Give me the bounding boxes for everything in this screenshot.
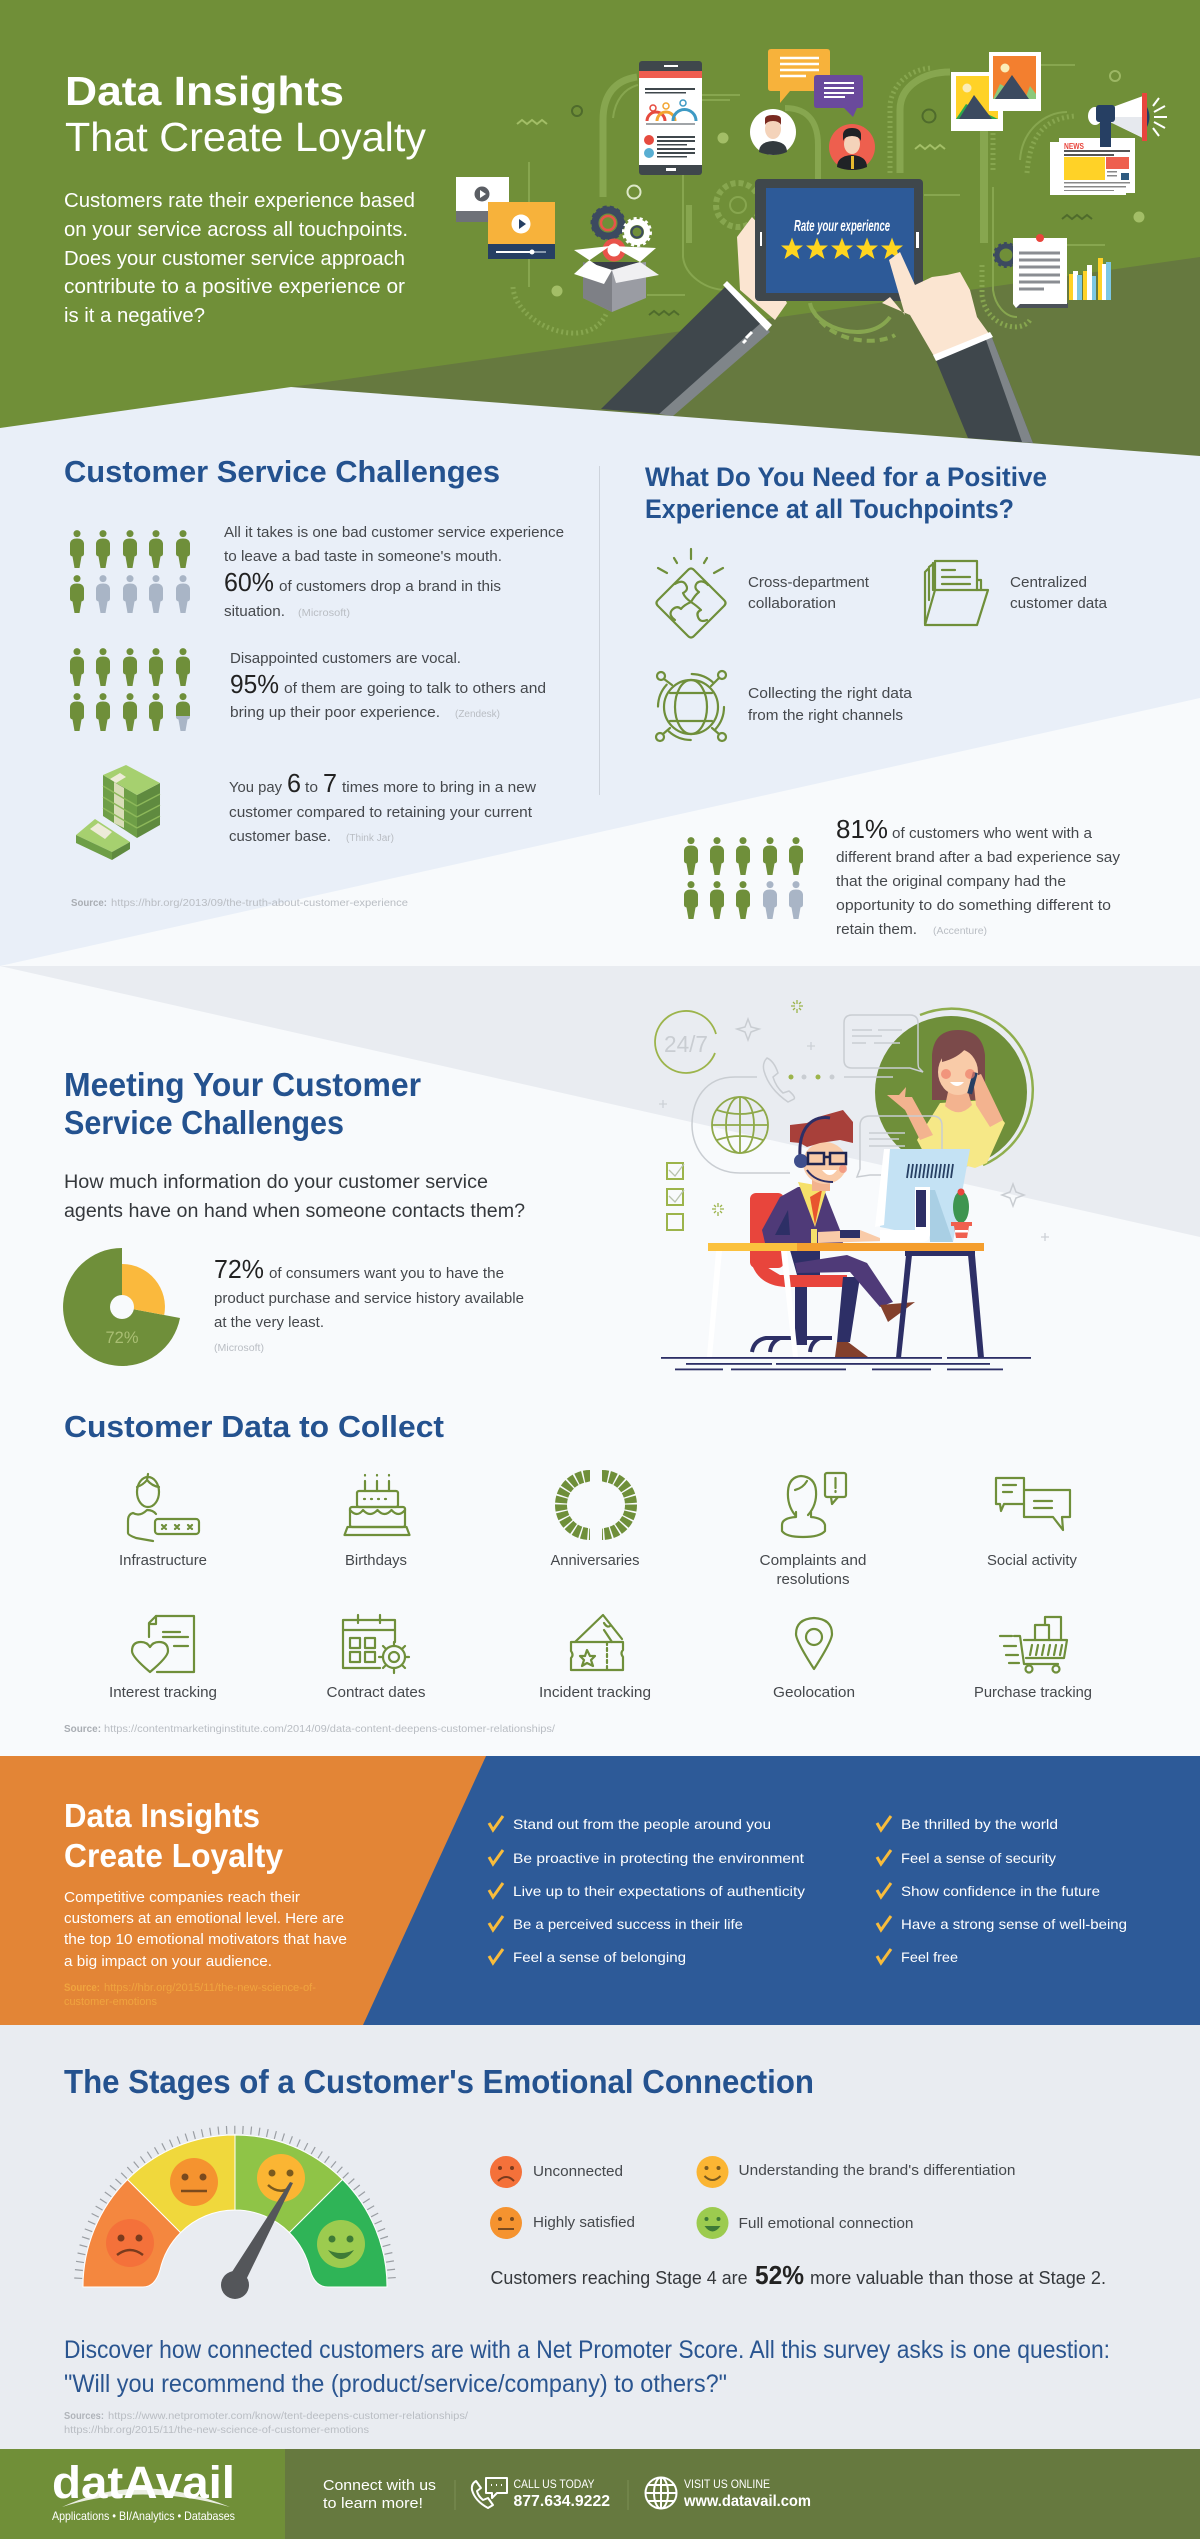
icon: note and bar chart (994, 234, 1111, 308)
text: 6 to 7 times: customer base. (229, 828, 331, 845)
illustration: hands and sleeves (601, 252, 1033, 443)
icon: customer avatars (750, 109, 875, 170)
text: 95 percent stat: bring up their poor experience. (230, 704, 440, 721)
text: collecting the right data: Collecting the right data (748, 685, 913, 702)
title (65, 68, 426, 160)
hero section background (0, 0, 1200, 460)
icon: complaints (782, 1473, 846, 1537)
text: cross-department (748, 574, 870, 612)
label: complaints and resolutions (760, 1552, 866, 1588)
caller in green circle (875, 1009, 1033, 1168)
icon: money stacks (76, 765, 160, 860)
text: centralized data: Centralized (1010, 574, 1087, 591)
label: geolocation: Geolocation (773, 1684, 855, 1701)
text: 72 percent stat: at the very least. (214, 1314, 324, 1331)
checklist: emotional motivators column 1: Be a perceived success in their life (513, 1916, 743, 1932)
label: contract dates: Contract dates (326, 1684, 426, 1701)
logo: datavail: Applications • BI/Analytics • Databases (52, 2509, 235, 2523)
title: Data Insights (65, 68, 344, 114)
pictogram: 95 percent (70, 648, 190, 731)
text: call us today (514, 2477, 610, 2510)
face: laugh (317, 2220, 365, 2268)
checklist (667, 1163, 684, 1230)
text: connect with us: to learn more! (323, 2495, 423, 2512)
24/7 clock (655, 1011, 716, 1073)
illustration: tablet rating (755, 179, 923, 301)
intro text: on your service across all touchpoints. (64, 219, 408, 241)
text: 81 percent stat: that the original company had the (836, 873, 1066, 890)
icon: gears in box (574, 207, 659, 312)
text: cross-department: collaboration (748, 595, 836, 612)
text: 6 to 7 times: 7 (323, 768, 337, 798)
text: 6 to 7 times: times more to bring in a new (342, 779, 536, 796)
checklist: emotional motivators column 1: Be proactive in protecting the environment (513, 1850, 804, 1866)
label: incident tracking: Incident tracking (539, 1684, 651, 1701)
text: how much information (64, 1172, 525, 1222)
band: data insights create loyalty (0, 1756, 1200, 2025)
text: 81 percent stat: of customers who went with a (892, 825, 1093, 842)
gauge segment: light green (235, 2135, 342, 2233)
globe (712, 1097, 768, 1153)
orange panel text: Competitive companies reach their (64, 1889, 300, 1906)
text: visit us online: VISIT US ONLINE (684, 2477, 770, 2491)
orange panel text: Source: (64, 1982, 100, 1994)
gauge segment: green (289, 2180, 387, 2287)
gauge needle (221, 2182, 293, 2299)
text: 6 to 7 times: (Think Jar) (346, 833, 394, 844)
text: 52 percent stat: more valuable than those at Stage 2. (810, 2268, 1106, 2288)
hero circuit background pattern (513, 65, 1144, 341)
text: 60 percent stat (224, 524, 564, 620)
gauge segment: yellow (128, 2135, 235, 2233)
source: customer data: Source: (64, 1724, 101, 1735)
heading: what do you need (645, 462, 1047, 524)
icon: puzzle (656, 549, 726, 638)
plus marks (659, 1042, 1049, 1241)
intro text: Does your customer service approach (64, 248, 405, 270)
orange panel text: the top 10 emotional motivators that have (64, 1931, 347, 1948)
text: cross-department: Cross-department (748, 574, 870, 591)
logo: datavail: datAvail (52, 2457, 235, 2508)
legend item: understanding (696, 2156, 1016, 2188)
text: collecting the right data: from the right channels (748, 707, 903, 724)
heading: customer service challenges: Customer Service Challenges (64, 454, 500, 489)
checklist: emotional motivators column 2: Show confidence in the future (901, 1883, 1100, 1899)
sources (64, 2411, 468, 2436)
illustration: customer service agent and caller (655, 1000, 1049, 1370)
gray line art: bubbles, phone, clock (692, 1015, 1024, 1206)
icon: megaphone and news (1050, 93, 1167, 195)
text: 95 percent stat: 95% (230, 669, 279, 699)
sources: https://hbr.org/2015/11/the-new-science-of-customer-emotions (64, 2425, 369, 2436)
text: 24/7: 24/7 (664, 1031, 708, 1057)
checklist: emotional motivators column 1: Feel a sense of belonging (513, 1949, 686, 1965)
intro text: Customers rate their experience based (64, 190, 415, 212)
checklist: emotional motivators column 1: Live up to their expectations of authenticity (513, 1883, 805, 1899)
text: 72 percent stat: product purchase and service history available (214, 1290, 524, 1307)
agent torso (762, 1182, 882, 1243)
icon: incident tracking (571, 1615, 623, 1670)
icon: speech bubbles (768, 49, 863, 117)
label: complaints and resolutions: Complaints and (760, 1552, 866, 1569)
chair (750, 1193, 847, 1352)
icon: geolocation (796, 1618, 832, 1669)
heading: customer data to collect: Customer Data to Collect (64, 1409, 444, 1444)
heading: meeting your customer service challenges (64, 1066, 421, 1141)
intro text: is it a negative? (64, 305, 205, 327)
section background: emotional connection (0, 2025, 1200, 2449)
icon: phone with charts (639, 61, 702, 175)
label: anniversaries: Anniversaries (550, 1552, 640, 1569)
text: 95 percent stat (230, 650, 546, 721)
text: visit us online: www.datavail.com (683, 2493, 811, 2510)
text: 52 percent stat (490, 2260, 1106, 2290)
checklist: emotional motivators column 2: Feel free (901, 1949, 958, 1965)
text: 60 percent stat: All it takes is one bad customer service experience (224, 524, 564, 541)
callout: net promoter score: "Will you recommend the (product/service/company) to others?" (64, 2370, 727, 2398)
callout: net promoter score: Discover how connected customers are with a Net Promoter Score. All this survey asks is one question: (64, 2336, 1110, 2364)
text: 72 percent stat (214, 1254, 524, 1354)
heading: what do you need: Experience at all Touchpoints? (645, 494, 1014, 524)
text: call us today: 877.634.9222 (514, 2493, 610, 2510)
icon: wreath (561, 1476, 631, 1534)
icon: video players (456, 177, 555, 259)
agent head (790, 1110, 853, 1191)
text: centralized data: customer data (1010, 595, 1108, 612)
face: neutral (170, 2158, 218, 2206)
text: connect with us: Connect with us (323, 2477, 436, 2494)
text: 6 to 7 times (229, 768, 536, 845)
text: 6 to 7 times: 6 (287, 768, 301, 798)
floor lines (661, 1357, 1031, 1370)
text: 60 percent stat: (Microsoft) (298, 608, 350, 619)
text: collecting the right data (748, 685, 913, 724)
legend item: full emotional connection (696, 2207, 914, 2239)
icon: photos (951, 52, 1041, 131)
text: 60 percent stat: situation. (224, 603, 285, 620)
icon: purchase tracking (1000, 1617, 1067, 1672)
text: 95 percent stat: Disappointed customers are vocal. (230, 650, 461, 667)
label: birthdays: Birthdays (345, 1552, 407, 1569)
source: challenges: Source: (71, 898, 107, 909)
text: call us today: CALL US TODAY (514, 2477, 594, 2491)
monitor (875, 1149, 970, 1242)
icon: folder (925, 561, 988, 625)
cactus (951, 1188, 972, 1238)
orange panel text: customers at an emotional level. Here are (64, 1910, 344, 1927)
heading: stages: The Stages of a Customer's Emotional Connection (64, 2063, 814, 2100)
legend item: highly satisfied: Highly satisfied (533, 2214, 635, 2231)
label: infrastructure: Infrastructure (119, 1552, 207, 1569)
heading: what do you need: What Do You Need for a Positive (645, 462, 1047, 492)
text: 52 percent stat: Customers reaching Stage 4 are (490, 2268, 748, 2288)
heading: meeting your customer service challenges: Meeting Your Customer (64, 1066, 421, 1103)
icon: birthday cake (344, 1475, 410, 1535)
face: sad (106, 2219, 154, 2267)
text: 60 percent stat: to leave a bad taste in someone's mouth. (224, 548, 502, 565)
gauge chart (78, 2130, 392, 2299)
text: 72 percent stat: (Microsoft) (214, 1343, 264, 1354)
checklist: emotional motivators column 1 (489, 1816, 805, 1965)
pictogram: 81 percent (684, 837, 803, 919)
text: 60 percent stat: of customers drop a brand in this (279, 578, 501, 595)
legend item: full emotional connection: Full emotional connection (738, 2215, 914, 2232)
face: smile (257, 2154, 305, 2202)
icon: social activity (996, 1478, 1070, 1530)
text: 6 to 7 times: You pay (229, 779, 282, 796)
icon: interest tracking (132, 1616, 194, 1672)
icon: phone (472, 2478, 507, 2508)
orange panel text: https://hbr.org/2015/11/the-new-science-of- (104, 1982, 316, 1994)
icon: infrastructure (128, 1474, 199, 1541)
label: complaints and resolutions: resolutions (776, 1571, 850, 1588)
source: challenges: https://hbr.org/2013/09/the-truth-about-customer-experience (111, 898, 408, 909)
icon: connected globe (656, 671, 726, 741)
section background: meeting challenges (0, 966, 1200, 1237)
text: 81 percent stat: (Accenture) (933, 926, 987, 937)
title: That Create Loyalty (65, 114, 426, 160)
icon: globe (646, 2478, 676, 2508)
text: 52 percent stat: 52% (755, 2260, 804, 2290)
source: customer data: https://contentmarketinginstitute.com/2014/09/data-content-deepens-customer-relationships/ (104, 1724, 555, 1735)
legend item: understanding: Understanding the brand's differentiation (738, 2162, 1016, 2179)
label: social activity: Social activity (987, 1552, 1077, 1569)
checklist: emotional motivators column 2: Be thrilled by the world (901, 1816, 1058, 1832)
intro text (64, 190, 415, 327)
gauge segment: orange (83, 2180, 181, 2287)
orange panel text: customer-emotions (64, 1996, 157, 2008)
text: connect with us (323, 2477, 436, 2512)
agent pants (788, 1243, 915, 1357)
pictogram: 60 percent (70, 530, 190, 613)
pie chart: 72 percent: 72% (106, 1328, 138, 1347)
text: centralized data (1010, 574, 1108, 612)
text: 81 percent stat (836, 814, 1121, 938)
checklist: emotional motivators column 2 (877, 1816, 1127, 1965)
text: how much information: agents have on hand when someone contacts them? (64, 1201, 525, 1222)
text: 60 percent stat: 60% (224, 567, 274, 597)
icon: contract dates (343, 1615, 409, 1673)
legend item: unconnected (490, 2156, 623, 2188)
text: 72 percent stat: 72% (214, 1254, 264, 1284)
divider (599, 466, 600, 795)
legend item: highly satisfied (490, 2207, 635, 2239)
text: visit us online (683, 2477, 811, 2510)
text: 81 percent stat: 81% (836, 814, 888, 844)
section background: challenges (0, 387, 1200, 966)
text: how much information: How much information do your customer service (64, 1172, 488, 1193)
intro text: contribute to a positive experience or (64, 276, 405, 298)
desk (707, 1243, 984, 1358)
text: 6 to 7 times: customer compared to retaining your current (229, 804, 533, 821)
sparkle dots (712, 1000, 803, 1216)
text: 81 percent stat: opportunity to do something different to (836, 897, 1111, 914)
checklist: emotional motivators column 2: Have a strong sense of well-being (901, 1916, 1127, 1932)
footer (0, 2449, 1200, 2539)
text: 6 to 7 times: to (305, 779, 318, 796)
callout: net promoter score (64, 2336, 1110, 2398)
label: purchase tracking: Purchase tracking (974, 1684, 1092, 1701)
text: 81 percent stat: retain them. (836, 921, 917, 938)
orange panel text: Data Insights (64, 1797, 260, 1834)
dots (788, 1074, 834, 1080)
text: 81 percent stat: different brand after a bad experience say (836, 849, 1121, 866)
orange panel text: Create Loyalty (64, 1837, 284, 1874)
illustration: left hand (737, 217, 787, 320)
text: 72 percent stat: of consumers want you to have the (269, 1265, 504, 1282)
checklist: emotional motivators column 1: Stand out from the people around you (513, 1816, 771, 1832)
pie chart: 72 percent (63, 1248, 180, 1366)
text: 95 percent stat: (Zendesk) (455, 709, 500, 720)
checklist: emotional motivators column 2: Feel a sense of security (901, 1850, 1056, 1866)
legend: stages (490, 2156, 1016, 2239)
orange panel text: a big impact on your audience. (64, 1953, 272, 1970)
sources: https://www.netpromoter.com/know/tent-deepens-customer-relationships/ (108, 2411, 468, 2422)
label: interest tracking: Interest tracking (109, 1684, 217, 1701)
heading: meeting your customer service challenges: Service Challenges (64, 1104, 344, 1141)
legend item: unconnected: Unconnected (533, 2163, 623, 2180)
illustration: tablet rating: Rate your experience (794, 218, 890, 235)
text: 95 percent stat: of them are going to talk to others and (284, 680, 546, 697)
sources: Sources: (64, 2411, 104, 2422)
icon: megaphone and news: NEWS (1064, 142, 1085, 151)
orange panel text (64, 1797, 347, 2008)
